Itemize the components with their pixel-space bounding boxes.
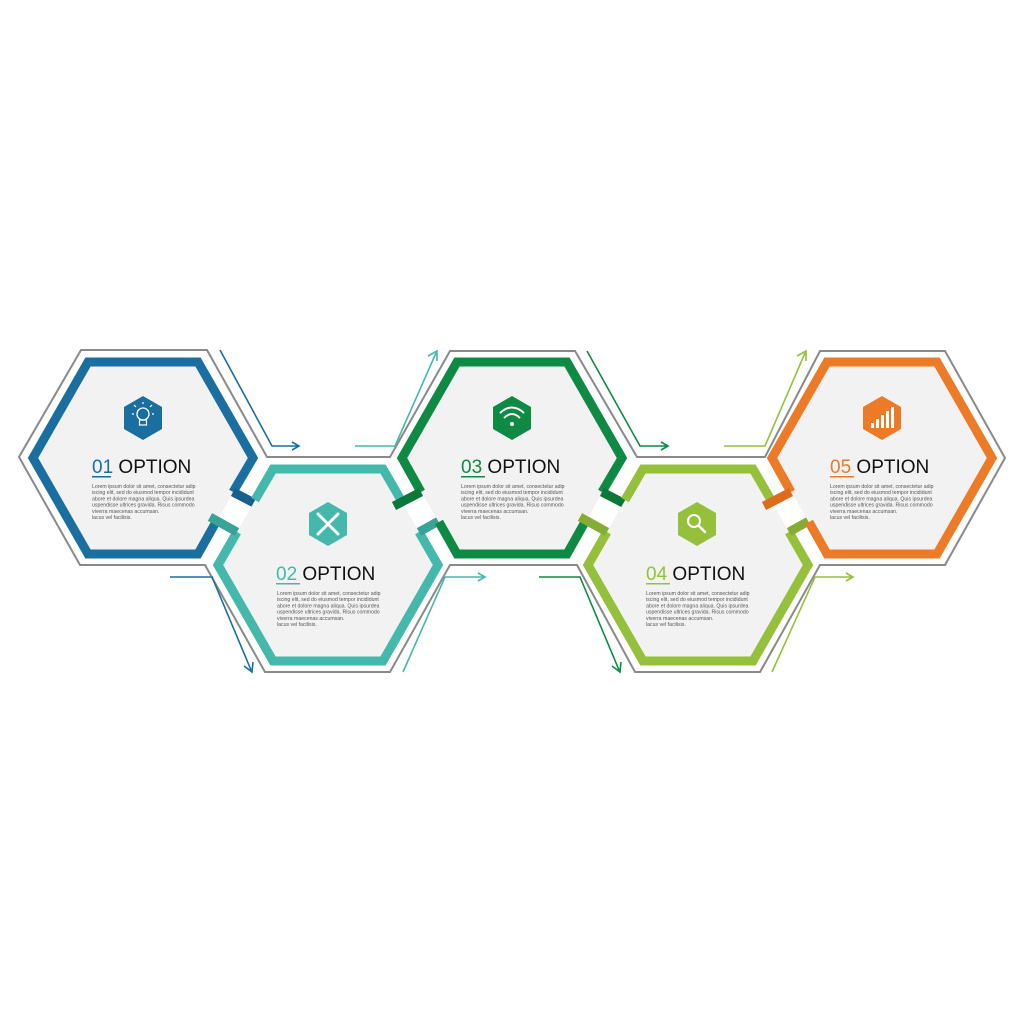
text: option 02: lacus vel facilisis. xyxy=(277,622,317,628)
text: option 01: iscing elit, sed do eiusmod tempor incididunt xyxy=(92,490,194,496)
hex 3 xyxy=(394,362,631,554)
text: option 05: 05 OPTION xyxy=(830,457,929,478)
text: option 05 xyxy=(830,457,934,521)
text: option 01: 01 OPTION xyxy=(92,457,191,478)
text: option 02: abore et dolore magna aliqua. Quis ipsurdea xyxy=(277,603,379,609)
text: option 05: iscing elit, sed do eiusmod tempor incididunt xyxy=(830,490,932,496)
icon: bars xyxy=(863,396,901,440)
text: option 02 xyxy=(276,564,381,628)
text: option 03 xyxy=(461,457,565,521)
gray snake outline xyxy=(19,350,1005,672)
text: option 03: viverra maecenas accumsan. xyxy=(461,509,528,515)
text: option 04: 04 OPTION xyxy=(646,564,745,585)
text: option 03: abore et dolore magna aliqua. Quis ipsurdea xyxy=(461,496,563,502)
text: option 01: viverra maecenas accumsan. xyxy=(92,509,159,515)
text: option 01: uspendisse ultrices gravida. Risus commodo xyxy=(92,503,195,509)
hex 1 xyxy=(33,362,262,554)
text: option 01 xyxy=(92,457,196,521)
text: option 05: abore et dolore magna aliqua. Quis ipsurdea xyxy=(830,496,932,502)
icon: search xyxy=(678,502,716,546)
icon: wifi xyxy=(493,396,531,440)
text: option 02: viverra maecenas accumsan. xyxy=(277,616,344,622)
text: option 05: lacus vel facilisis. xyxy=(830,515,870,521)
text: option 04: uspendisse ultrices gravida. Risus commodo xyxy=(646,610,749,616)
text: option 02: Lorem ipsum dolor sit amet, consectetur adip xyxy=(277,591,381,597)
arrows xyxy=(170,350,853,672)
text: option 03: uspendisse ultrices gravida. Risus commodo xyxy=(461,503,564,509)
text: option 01: abore et dolore magna aliqua. Quis ipsurdea xyxy=(92,496,194,502)
text: option 04: abore et dolore magna aliqua. Quis ipsurdea xyxy=(646,603,748,609)
text: option 02: iscing elit, sed do eiusmod tempor incididunt xyxy=(277,597,379,603)
hex 4 xyxy=(580,469,816,661)
text: option 01: lacus vel facilisis. xyxy=(92,515,132,521)
text: option 04: iscing elit, sed do eiusmod tempor incididunt xyxy=(646,597,748,603)
text: option 04 xyxy=(646,564,750,628)
text: option 05: viverra maecenas accumsan. xyxy=(830,509,897,515)
text: option 04: lacus vel facilisis. xyxy=(646,622,686,628)
icon: light bulb xyxy=(124,396,162,440)
text: option 03: iscing elit, sed do eiusmod tempor incididunt xyxy=(461,490,563,496)
text: option 04: viverra maecenas accumsan. xyxy=(646,616,713,622)
text: option 05: Lorem ipsum dolor sit amet, consectetur adip xyxy=(830,484,934,490)
text: option 04: Lorem ipsum dolor sit amet, consectetur adip xyxy=(646,591,750,597)
icon: tools xyxy=(309,502,347,546)
text: option 03: lacus vel facilisis. xyxy=(461,515,501,521)
text: option 01: Lorem ipsum dolor sit amet, consectetur adip xyxy=(92,484,196,490)
text: option 02: uspendisse ultrices gravida. Risus commodo xyxy=(277,610,380,616)
text: option 05: uspendisse ultrices gravida. Risus commodo xyxy=(830,503,933,509)
hex 5 xyxy=(764,362,992,554)
text: option 03: 03 OPTION xyxy=(461,457,560,478)
hex 2 xyxy=(210,469,446,661)
text: option 02: 02 OPTION xyxy=(276,564,375,585)
text: option 03: Lorem ipsum dolor sit amet, consectetur adip xyxy=(461,484,565,490)
